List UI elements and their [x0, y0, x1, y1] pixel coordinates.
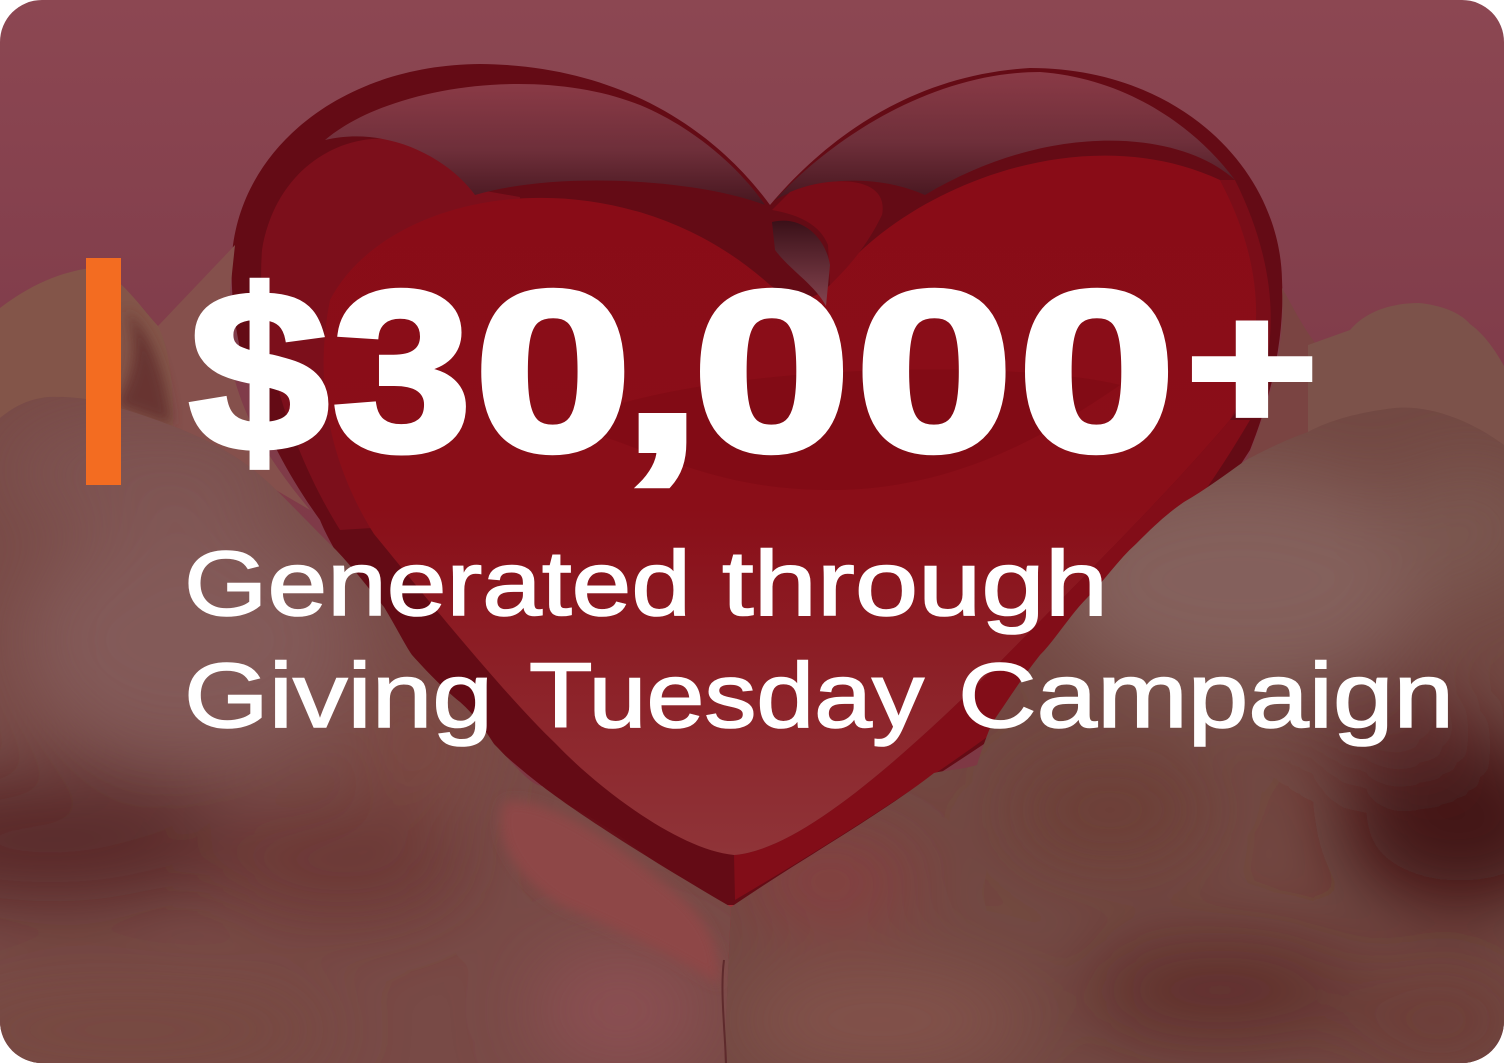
right top finger [1308, 303, 1504, 460]
right back finger [1248, 288, 1314, 459]
heart centre fold [772, 181, 883, 285]
subtitle line 2: Campaign [958, 645, 1454, 747]
headline amount: 0,000 [474, 243, 1176, 499]
hand seam [722, 960, 726, 1063]
heart left gloss [325, 84, 765, 205]
left hand [0, 397, 731, 1063]
heart tip seam [728, 905, 734, 936]
heart right gloss [775, 72, 1235, 200]
heart left mass [261, 138, 520, 530]
headline amount [189, 243, 1318, 499]
subtitle line 1 [184, 533, 1108, 635]
heart right rim [1220, 180, 1271, 420]
heart inner dark curve [610, 370, 1118, 484]
heart lower right band [734, 420, 1250, 900]
subtitle [184, 533, 1454, 747]
subtitle line 2 [184, 645, 1454, 747]
right hand [700, 380, 1504, 1063]
heart centre notch [772, 221, 830, 306]
headline amount: $3 [189, 244, 472, 499]
left back finger [158, 245, 310, 510]
subtitle line 2: Tuesday [529, 645, 924, 747]
left finger shadow [121, 316, 174, 424]
subtitle line 1: through [722, 533, 1108, 635]
left palm highlight [501, 801, 720, 985]
heart inner red [324, 156, 1256, 855]
heart [232, 64, 1282, 960]
left top finger [0, 268, 173, 440]
left hand shading [0, 420, 710, 1063]
headline amount: + [1186, 267, 1318, 468]
subtitle line 2: Giving [184, 645, 493, 747]
right hand shading [730, 460, 1504, 1063]
heart body [232, 64, 1282, 907]
subtitle line 1: Generated [184, 533, 691, 635]
orange accent bar [86, 258, 121, 485]
